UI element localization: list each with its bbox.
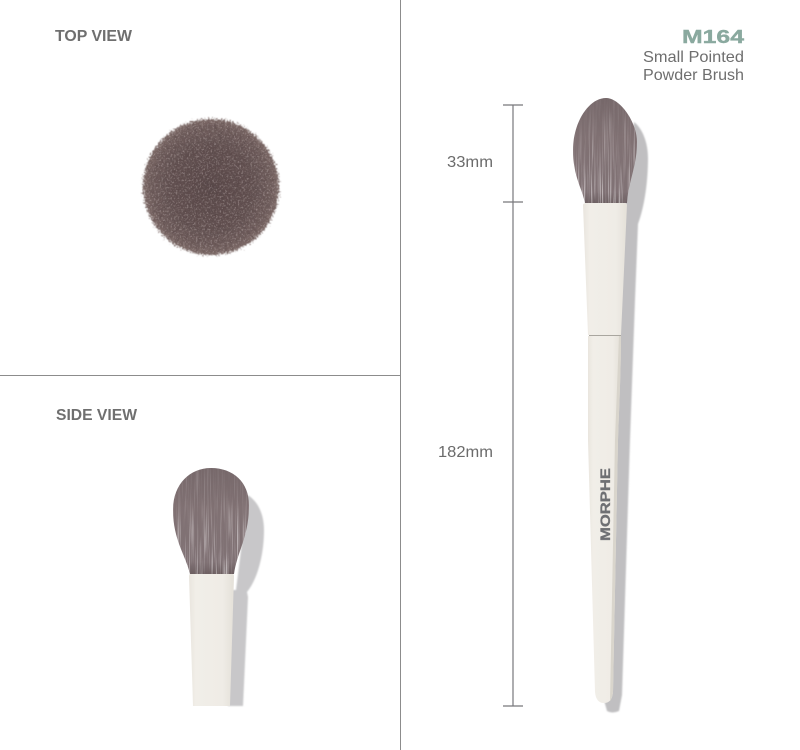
image: full brush	[565, 90, 648, 712]
handle: lower	[588, 336, 621, 703]
shadow: full brush	[604, 122, 648, 712]
bristles: full brush	[573, 98, 637, 203]
measure: bristle and handle scale	[503, 105, 523, 706]
subtitle: product name	[643, 49, 744, 84]
heading: side view: SIDE VIEW	[56, 407, 137, 424]
panel divider: vertical	[400, 0, 402, 750]
ferrule: full brush	[583, 203, 627, 335]
subtitle: product name: Small Pointed	[643, 49, 744, 66]
handle edge: shade	[610, 336, 621, 701]
brand text on handle: MORPHE	[598, 468, 613, 541]
title: product code: M164	[682, 27, 744, 47]
image: brush side view	[173, 468, 264, 706]
subtitle: product name: Powder Brush	[643, 67, 744, 84]
image: brush head from above	[141, 117, 281, 257]
shadow: side brush	[228, 495, 264, 706]
ferrule: side brush	[189, 573, 234, 706]
bristles: side brush	[173, 468, 249, 574]
heading: top view: TOP VIEW	[55, 28, 132, 45]
label: 33mm: 33mm	[447, 154, 493, 171]
label: 182mm: 182mm	[438, 444, 493, 461]
panel divider: horizontal	[0, 374, 400, 376]
ferrule seam	[589, 334, 621, 336]
